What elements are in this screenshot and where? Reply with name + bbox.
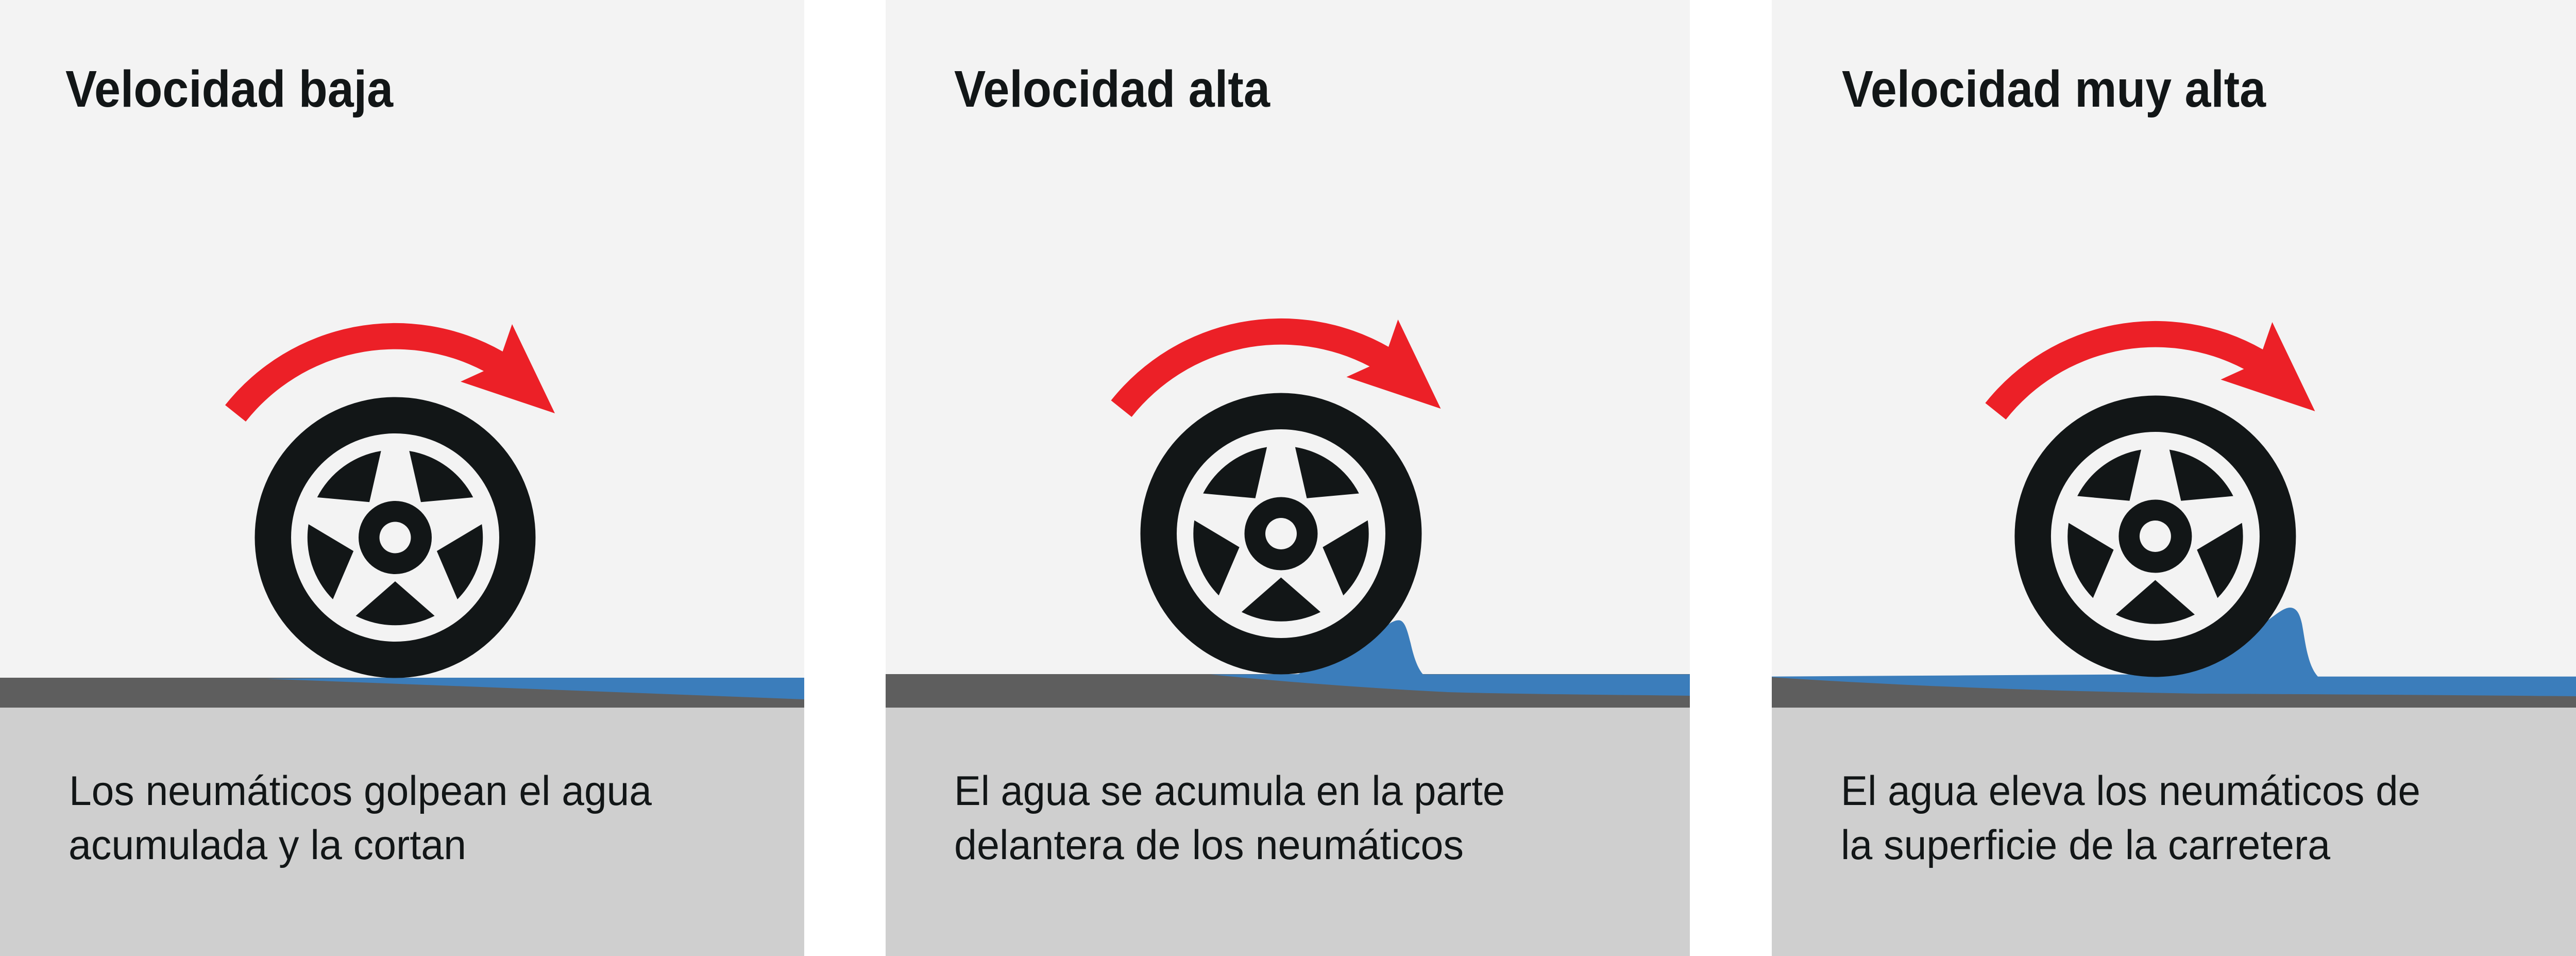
- caption text: la superficie de la carretera: [1841, 822, 2331, 868]
- caption band: [886, 708, 1690, 956]
- heading: Velocidad muy alta: [1842, 60, 2266, 118]
- water wave building up in front of tire: [1211, 620, 1690, 696]
- caption band: [1772, 708, 2576, 956]
- heading: Velocidad alta: [954, 60, 1270, 118]
- panel background: [0, 0, 804, 956]
- caption text: acumulada y la cortan: [69, 822, 466, 868]
- icon: wheel: [255, 397, 536, 678]
- panel: velocidad baja: [0, 0, 804, 956]
- caption text: El agua se acumula en la parte: [954, 768, 1505, 814]
- water wave lifting the tire: [1772, 608, 2576, 696]
- caption text: El agua eleva los neumáticos de: [1841, 768, 2420, 814]
- road: [886, 674, 1690, 708]
- water film: [265, 678, 804, 699]
- red rotation arrow: [225, 323, 555, 422]
- icon: wheel: [2014, 396, 2296, 677]
- icon: wheel: [1141, 393, 1422, 674]
- road: [1772, 677, 2576, 708]
- panel: velocidad alta: [886, 0, 1690, 956]
- road: [0, 678, 804, 708]
- panel background: [1772, 0, 2576, 956]
- red rotation arrow: [1985, 321, 2315, 420]
- caption band: [0, 708, 804, 956]
- panel background: [886, 0, 1690, 956]
- caption text: delantera de los neumáticos: [954, 822, 1464, 868]
- caption text: Los neumáticos golpean el agua: [69, 768, 652, 814]
- heading: Velocidad baja: [65, 60, 394, 118]
- panel: velocidad muy alta: [1772, 0, 2576, 956]
- red rotation arrow: [1111, 318, 1440, 417]
